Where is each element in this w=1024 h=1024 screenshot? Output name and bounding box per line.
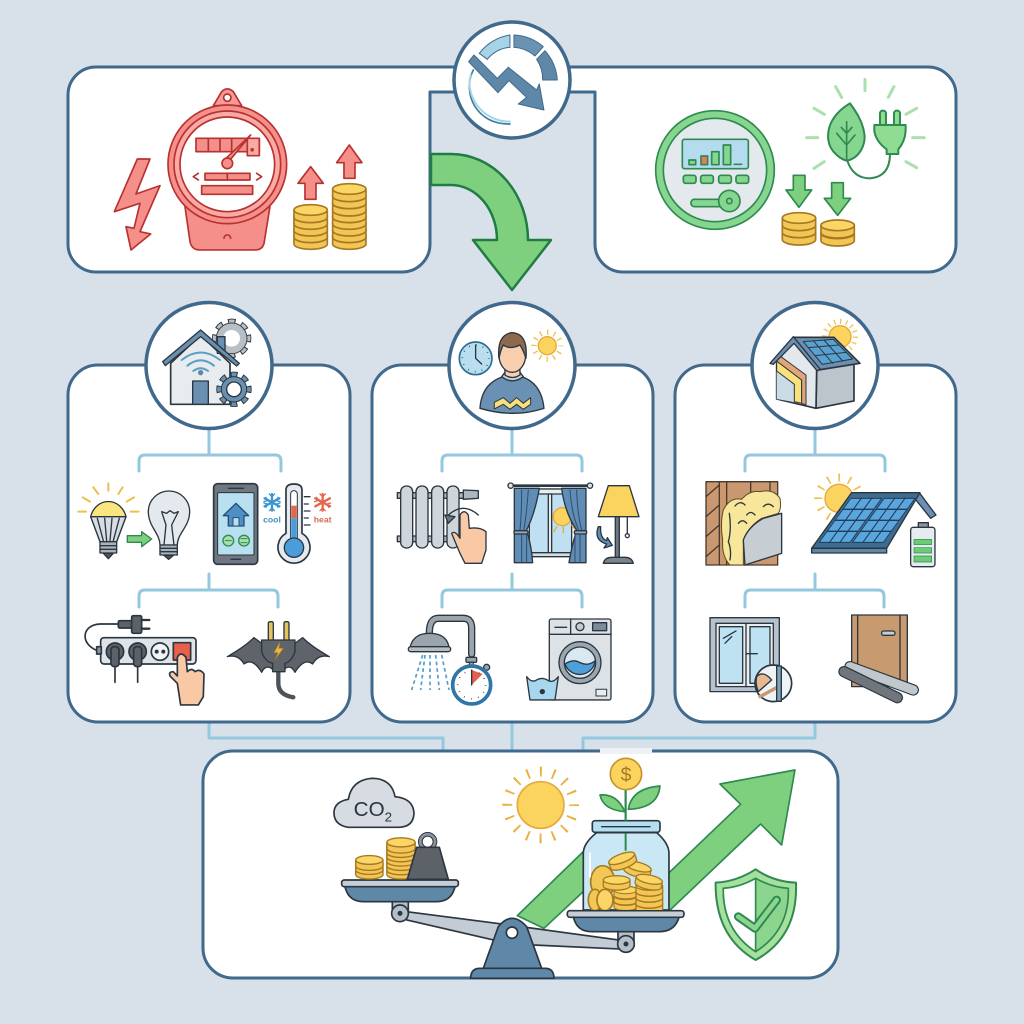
icon: curtains with window and sun [508,483,593,563]
icon: power strip with switch and hand [85,616,204,705]
icon: coins and weight on left pan [356,834,448,879]
connectors between panels and outcome [209,722,815,751]
arrow: rising green arrow [517,770,795,928]
icon: green shield with check [716,869,796,960]
icon: home with wifi and gears [163,322,249,404]
connector tree [442,430,582,607]
label: CO2: 2 [385,809,392,824]
icon: rising coin stacks [294,145,366,249]
icon: person with clock and sun [459,332,561,413]
icon: lightning bolt [114,159,160,250]
icon: smartphone with home app [214,484,258,564]
icon: wall insulation [706,482,782,565]
icon: sun [507,772,574,838]
panel: low energy bill [554,67,956,272]
circle: person habits [449,302,575,428]
icon: LED bulb swap [78,483,190,559]
icon: vampire plug standby power [227,622,329,697]
circle: insulated solar house [752,302,878,428]
connector tree [139,430,281,607]
icon: floor lamp [597,486,639,563]
label: cool: cool [263,515,281,525]
label: CO2: CO [354,798,385,821]
icon: shower and timer [408,618,491,704]
icon: house with solar roof [770,321,860,408]
icon: balance scale [342,880,684,978]
icon: gauge and zigzag down arrow [469,35,557,124]
panel: outcome savings [203,748,838,978]
icon: double glazed window [710,618,792,702]
icon: falling coin stacks [782,175,854,246]
icon: solar panel with battery [812,478,936,567]
circle: smart home [146,302,272,428]
decorative gap on border [600,748,652,754]
label: heat: heat [314,515,332,525]
icon: radiator valve and hand [397,486,486,563]
icon: thermostat cool and heat [263,484,332,563]
connector tree [745,430,885,607]
panel: home upgrades [675,302,956,722]
icon: leaf and plug with rays [807,79,924,178]
panel: high energy bill [68,67,470,272]
arrow: curved green transition arrow [431,154,551,290]
icon: green smart meter [656,111,774,229]
label: dollar sign: $ [621,765,632,786]
panel: smart home actions [68,302,350,722]
icon: red electricity meter [168,89,287,250]
icon: door with draught excluder [844,615,913,698]
icon: badge with falling consumption trend [454,22,570,138]
icon: CO2 cloud [334,778,414,827]
icon: washing machine with wash tub [527,619,611,700]
icon: savings jar with plant [583,758,669,914]
panel: behaviour actions [372,302,653,722]
